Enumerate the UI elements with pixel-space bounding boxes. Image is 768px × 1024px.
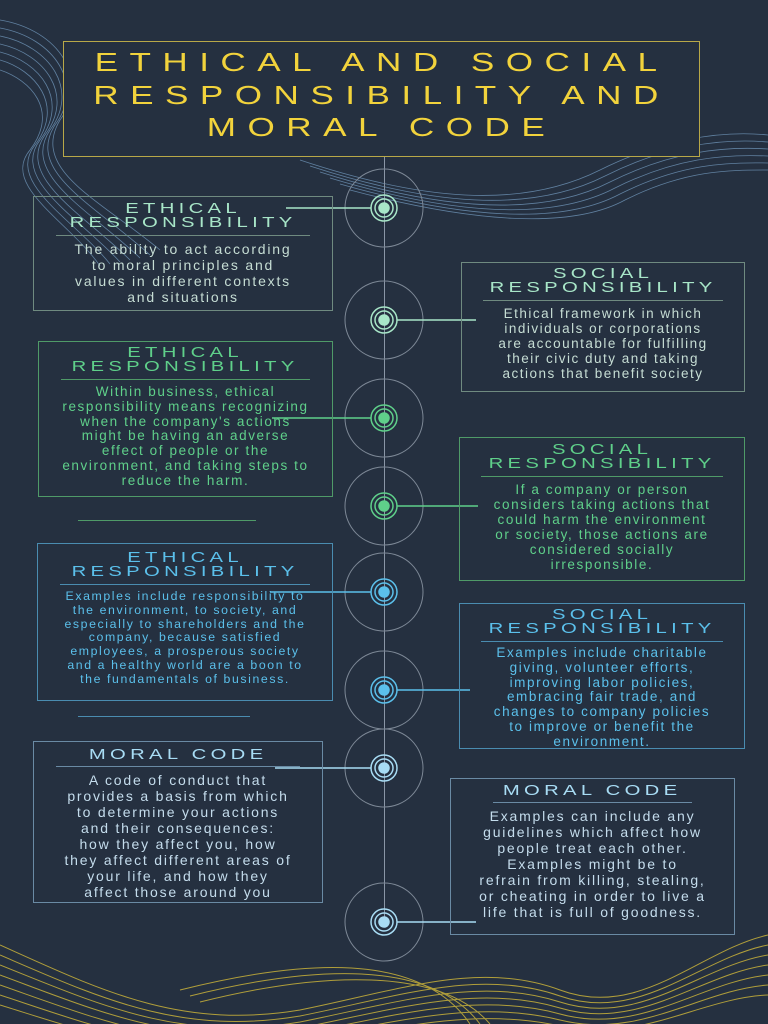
panel: ethical responsibility 1: and situations <box>127 289 239 305</box>
panel: ethical responsibility 2: when the company's actions <box>80 414 291 429</box>
panel: ethical responsibility 3: Examples include responsibility to <box>66 589 304 603</box>
panel: moral code 1: to determine your actions <box>77 804 279 820</box>
panel: moral code 1: how they affect you, how <box>79 836 277 852</box>
panel: ethical responsibility 1: The ability to act according <box>75 241 291 257</box>
panel: moral code 2 <box>450 778 735 935</box>
panel: moral code 1: your life, and how they <box>87 868 269 884</box>
node 1 <box>286 195 397 221</box>
panel: moral code 1: affect those around you <box>84 884 272 900</box>
panel: social responsibility 3: SOCIAL <box>552 606 652 623</box>
panel: social responsibility 3 <box>459 603 745 749</box>
panel: social responsibility 3: changes to company policies <box>494 704 710 719</box>
panel: moral code 2: Examples can include any <box>490 808 695 824</box>
title: ETHICAL AND SOCIAL <box>95 47 668 77</box>
node 8 <box>371 909 476 935</box>
panel: ethical responsibility 3: especially to shareholders and the <box>64 617 306 631</box>
panel: ethical responsibility 1: RESPONSIBILITY <box>69 214 297 231</box>
panel: social responsibility 1: Ethical framework in which <box>504 306 702 321</box>
panel: ethical responsibility 3: ETHICAL <box>127 549 243 566</box>
node 7 <box>275 755 397 781</box>
panel: ethical responsibility 1 <box>33 196 333 311</box>
panel: ethical responsibility 2: ETHICAL <box>128 344 243 361</box>
panel: ethical responsibility 1: to moral principles and <box>92 257 274 273</box>
panel: social responsibility 3: Examples include charitable <box>496 645 708 660</box>
panel: ethical responsibility 2: Within business, ethical <box>96 384 275 399</box>
panel: ethical responsibility 2: effect of people or the <box>102 443 269 458</box>
divider <box>78 520 256 521</box>
panel: social responsibility 1: RESPONSIBILITY <box>489 279 717 296</box>
panel: moral code 2: guidelines which affect how <box>483 824 702 840</box>
title <box>63 41 700 157</box>
title: RESPONSIBILITY AND <box>93 80 670 110</box>
node 4 <box>371 493 478 519</box>
panel: ethical responsibility 2: responsibility means recognizing <box>62 399 309 414</box>
panel: social responsibility 2: considers taking actions that <box>494 497 710 512</box>
panel: ethical responsibility 2: reduce the harm. <box>122 473 249 488</box>
panel: moral code 1: A code of conduct that <box>89 772 267 788</box>
panel: social responsibility 3: embracing fair trade, and <box>507 689 697 704</box>
panel: social responsibility 3: to improve or benefit the <box>509 719 695 734</box>
panel: social responsibility 3: giving, volunteer efforts, <box>510 660 694 675</box>
panel: moral code 1 <box>33 741 323 903</box>
panel: social responsibility 3: RESPONSIBILITY <box>488 620 716 637</box>
panel: social responsibility 2: could harm the environment <box>498 512 706 527</box>
panel: moral code 1: provides a basis from which <box>67 788 289 804</box>
panel: ethical responsibility 2: might be having an adverse <box>82 428 289 443</box>
panel: moral code 2: Examples might be to <box>507 856 678 872</box>
node 3 <box>272 405 397 431</box>
panel: social responsibility 2: If a company or person <box>515 482 689 497</box>
panel: moral code 2: life that is full of goodness. <box>483 904 702 920</box>
title: MORAL CODE <box>207 112 556 142</box>
timeline line <box>384 157 385 922</box>
panel: social responsibility 1: SOCIAL <box>553 265 653 282</box>
panel: social responsibility 2: irresponsible. <box>551 557 653 572</box>
node 2 <box>371 307 476 333</box>
panel: ethical responsibility 3: RESPONSIBILITY <box>71 563 299 580</box>
panel: ethical responsibility 3: employees, a prosperous society <box>70 644 300 658</box>
panel: ethical responsibility 3 <box>37 543 333 701</box>
panel: ethical responsibility 3: and a healthy world are a boon to <box>67 658 303 672</box>
panel: social responsibility 3: improving labor policies, <box>510 675 694 690</box>
panel: social responsibility 2 <box>459 437 745 581</box>
panel: social responsibility 2: or society, those actions are <box>495 527 709 542</box>
panel: social responsibility 1: actions that benefit society <box>502 366 704 381</box>
panel: ethical responsibility 2: RESPONSIBILITY <box>72 358 299 375</box>
panel: social responsibility 1: are accountable for fulfilling <box>498 336 708 351</box>
panel: moral code 1: MORAL CODE <box>89 746 267 763</box>
panel: moral code 1: they affect different areas of <box>64 852 292 868</box>
panel: moral code 1: and their consequences: <box>81 820 275 836</box>
panel: social responsibility 2: considered socially <box>530 542 674 557</box>
node 6 <box>371 677 470 703</box>
panel: ethical responsibility 2 <box>38 341 333 497</box>
panel: social responsibility 1: individuals or corporations <box>504 321 702 336</box>
panel: social responsibility 2: RESPONSIBILITY <box>488 455 716 472</box>
panel: moral code 2: refrain from killing, stealing, <box>479 872 706 888</box>
panel: ethical responsibility 1: ETHICAL <box>125 200 241 217</box>
panel: social responsibility 3: environment. <box>553 734 651 749</box>
panel: moral code 2: people treat each other. <box>497 840 688 856</box>
node 5 <box>270 579 397 605</box>
panel: social responsibility 1: their civic duty and taking <box>507 351 699 366</box>
panel: ethical responsibility 2: environment, and taking steps to <box>62 458 309 473</box>
panel: ethical responsibility 1: values in different contexts <box>75 273 291 289</box>
panel: ethical responsibility 3: the environment, to society, and <box>73 603 297 617</box>
panel: social responsibility 2: SOCIAL <box>552 441 652 458</box>
panel: ethical responsibility 3: company, because satisfied <box>89 630 281 644</box>
panel: ethical responsibility 3: the fundamentals of business. <box>80 672 290 686</box>
panel: social responsibility 1 <box>461 262 745 392</box>
panel: moral code 2: or cheating in order to live a <box>479 888 706 904</box>
panel: moral code 2: MORAL CODE <box>503 782 682 799</box>
divider <box>78 716 250 717</box>
